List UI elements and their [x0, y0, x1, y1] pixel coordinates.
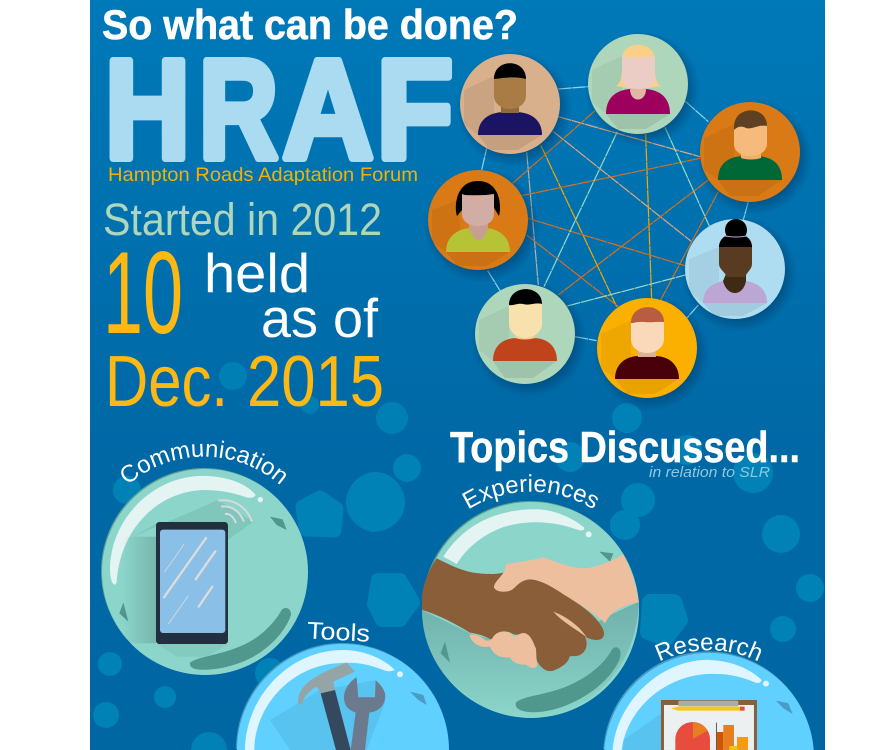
- HRAF heading: R: [199, 30, 278, 188]
- lower bubble shading: [422, 602, 639, 717]
- bubble highlights: [110, 476, 256, 585]
- stat: 10 held as of Dec. 2015: Dec.: [105, 342, 228, 422]
- HRAF full name: Hampton Roads Adaptation Forum: [108, 164, 418, 186]
- person: woman with dark bob: [424, 167, 540, 283]
- stat: 10 held as of Dec. 2015: 10: [103, 227, 183, 358]
- bubble: experiences: [422, 474, 639, 718]
- HRAF heading: A: [282, 30, 374, 188]
- stat: 10 held as of Dec. 2015: as of: [261, 287, 379, 349]
- HRAF heading: H: [105, 30, 190, 188]
- bubble sphere: [423, 502, 639, 718]
- icon: pie chart: [675, 722, 710, 750]
- heading: topics discussed: Topics Discussed...: [450, 423, 800, 472]
- bubble reflections: [119, 517, 291, 670]
- bubble rim: [422, 501, 638, 717]
- person: green circle man: [471, 281, 587, 397]
- phone cast shadow: [122, 500, 253, 657]
- person: yellow circle man: [593, 295, 709, 411]
- HRAF heading: F: [377, 30, 453, 188]
- label: experiences: Experiences: [462, 474, 598, 509]
- bubble reflections: [441, 552, 621, 712]
- bubble sphere: [604, 653, 814, 750]
- HRAF heading: [105, 30, 453, 188]
- bubble sphere: [237, 644, 449, 750]
- icon: handshake: [422, 554, 639, 671]
- bubble rim: [236, 643, 448, 749]
- bubble rim: [101, 468, 307, 674]
- person: woman with bun: [681, 216, 797, 332]
- label: research: Research: [654, 637, 762, 661]
- title: So what can be done?: [102, 1, 518, 48]
- icon: wifi signal: [218, 500, 252, 523]
- stat: 10 held as of Dec. 2015: held: [204, 242, 310, 304]
- stat: 10 held as of Dec. 2015: 2015: [247, 342, 384, 422]
- icon: hammer: [298, 663, 355, 750]
- bubble rim: [603, 651, 813, 749]
- bubble: tools: [236, 617, 449, 750]
- icon: bar chart: [716, 723, 748, 750]
- tool cast shadow: [270, 680, 385, 750]
- icon: wrench: [344, 677, 385, 750]
- person: orange circle man: [696, 99, 812, 215]
- stat: 10 held as of Dec. 2015: [103, 227, 384, 422]
- bubble highlights: [613, 660, 762, 750]
- network lines: [482, 87, 748, 341]
- icon: smartphone: [156, 522, 228, 644]
- label: communication: Communication: [121, 440, 286, 484]
- bubble highlights: [443, 509, 584, 564]
- subheading: in relation to SLR: in relation to SLR: [649, 464, 770, 481]
- bubble: research: [603, 637, 814, 750]
- label: tools: Tools: [306, 617, 371, 648]
- started in 2012: Started in 2012: [103, 194, 382, 245]
- bubble sphere: [102, 469, 308, 675]
- bubble highlights: [245, 650, 395, 750]
- background blobs: [93, 362, 824, 750]
- bubble: communication: [101, 440, 308, 675]
- clipboard shadow: [623, 713, 662, 750]
- person: blonde woman: [584, 31, 700, 147]
- icon: clipboard: [661, 700, 757, 750]
- person: tan circle: [456, 51, 572, 167]
